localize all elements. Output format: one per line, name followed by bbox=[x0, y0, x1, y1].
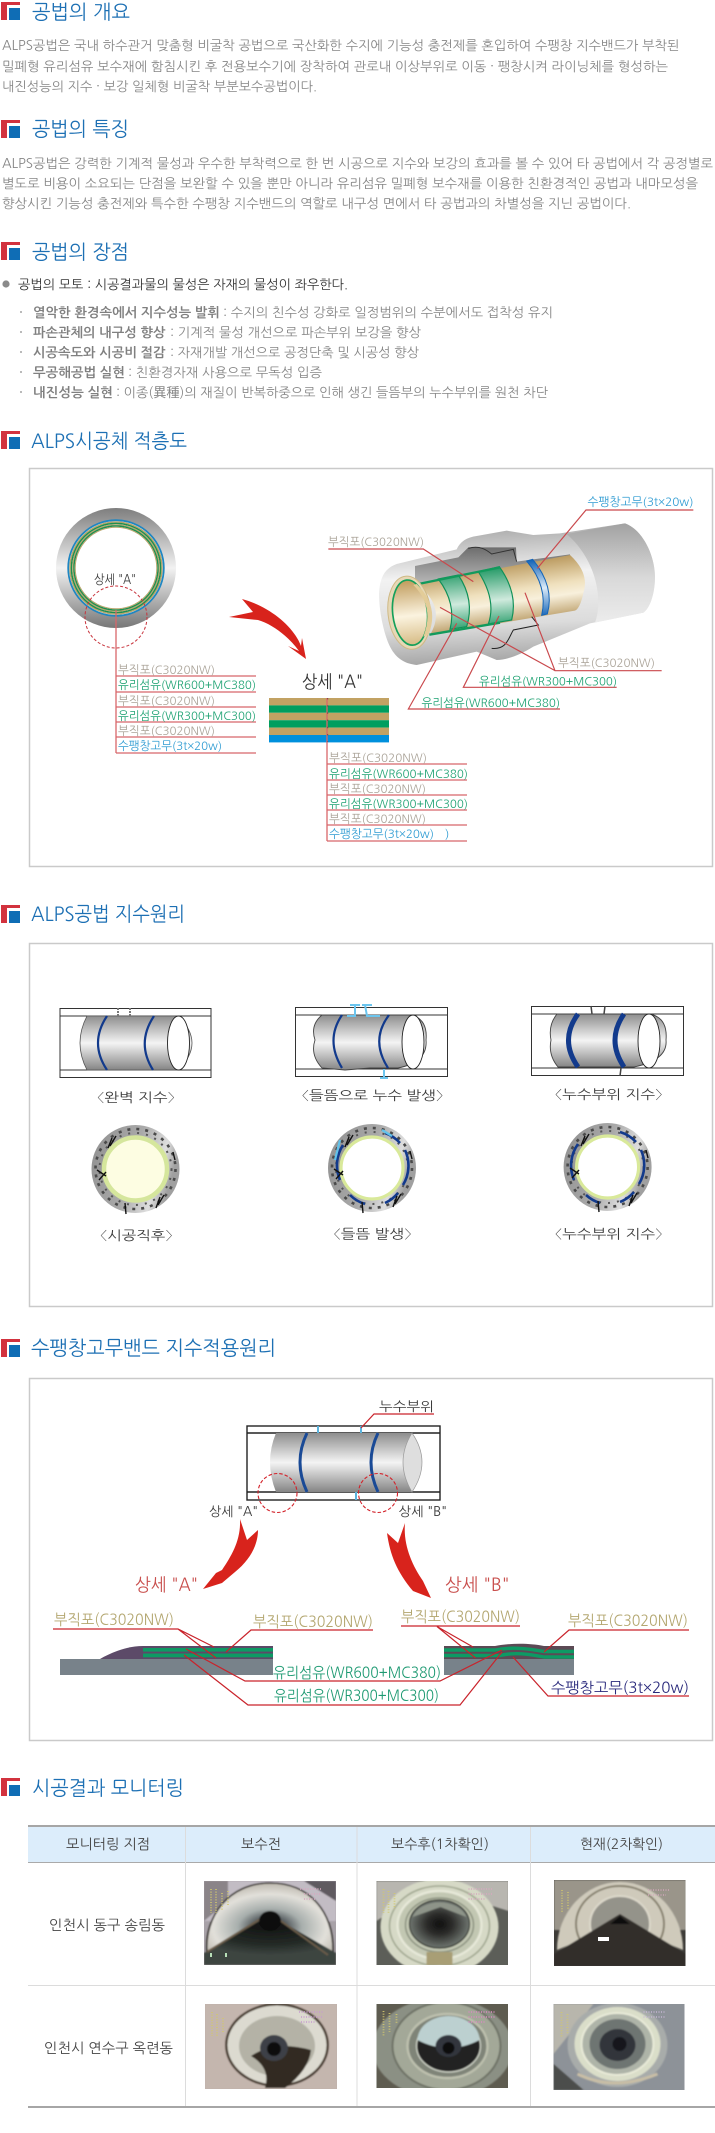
callouts: pipe labels: 부직포(C3020NW) bbox=[328, 536, 424, 548]
cross-section: 들뜸 발생 bbox=[328, 1124, 416, 1213]
leader list: stack layers: 부직포(C3020NW) bbox=[329, 752, 427, 764]
table header: 보수전 bbox=[241, 1837, 281, 1852]
label: 누수부위 지수 2: 〈누수부위 지수〉 bbox=[555, 1228, 663, 1240]
leader list: stack layers: 부직포(C3020NW) bbox=[329, 813, 426, 825]
pipe diagram: 누수부위 지수 bbox=[532, 1006, 684, 1076]
text block: features: 별도로 비용이 소요되는 단점을 보완할 수 있을 뿐만 아니라 유리섬유 밀폐형 보수재를 이용한 친환경적인 공법과 내마모성을 bbox=[2, 177, 698, 190]
label: right 부직포 1: 부직포(C3020NW) bbox=[401, 1609, 520, 1625]
row label: 인천시 연수구 옥련동: 인천시 연수구 옥련동 bbox=[44, 2041, 173, 2056]
leader list: ring layers: 부직포(C3020NW) bbox=[118, 664, 215, 676]
photo: row 1 current bbox=[554, 1880, 686, 1966]
label: 완벽 지수: 〈완벽 지수〉 bbox=[97, 1091, 175, 1104]
label: 상세 A large: 상세 "A" bbox=[302, 673, 363, 691]
heading: 공법의 특징: 공법의 특징 bbox=[32, 119, 129, 139]
callouts: pipe labels: 유리섬유(WR300+MC300) bbox=[479, 676, 617, 688]
arrow: right red bbox=[387, 1523, 431, 1598]
label: 누수부위 지수: 〈누수부위 지수〉 bbox=[555, 1088, 663, 1101]
item 1 bbox=[20, 305, 553, 319]
leader list: stack layers: ) bbox=[445, 828, 449, 840]
arrow: left red bbox=[203, 1519, 258, 1589]
cross-section: 시공직후 bbox=[92, 1125, 180, 1214]
leader list: stack layers: 수팽창고무(3t×20w) bbox=[329, 828, 434, 840]
label: left 부직포 1: 부직포(C3020NW) bbox=[54, 1612, 174, 1628]
label: 유리섬유 WR600: 유리섬유(WR600+MC380) bbox=[273, 1665, 441, 1681]
item 3 bbox=[20, 346, 419, 359]
label: 상세 B small: 상세 "B" bbox=[398, 1505, 447, 1518]
label: 상세 A small: 상세 "A" bbox=[209, 1505, 258, 1518]
photo: row 2 current bbox=[554, 2004, 684, 2090]
row label: 인천시 동구 송림동: 인천시 동구 송림동 bbox=[49, 1918, 165, 1933]
text block: features: 향상시킨 기능성 충전제와 특수한 수팽창 지수밴드의 역할로 내구성 면에서 타 공법과의 차별성을 지닌 공법이다. bbox=[2, 197, 631, 210]
3D pipe cutaway bbox=[328, 510, 693, 709]
heading: 공법의 개요: 공법의 개요 bbox=[32, 2, 130, 22]
pipe diagram: 완벽 지수 bbox=[60, 1008, 211, 1078]
label: right 부직포 2: 부직포(C3020NW) bbox=[568, 1613, 688, 1629]
item 3: 시공속도와 시공비 절감 bbox=[33, 346, 166, 359]
table: monitoring bbox=[28, 1825, 715, 2108]
label: 상세 A on ring: 상세 "A" bbox=[94, 573, 136, 586]
pipe diagram: 들뜸으로 누수 발생 bbox=[296, 1005, 448, 1078]
leader list: ring layers: 부직포(C3020NW) bbox=[118, 725, 215, 737]
panel: waterproofing principle bbox=[30, 944, 712, 1306]
motto line with bullet: 공법의 모토 : 시공결과물의 물성은 자재의 물성이 좌우한다. bbox=[18, 278, 348, 291]
heading: 시공결과 모니터링: 시공결과 모니터링 bbox=[32, 1778, 184, 1798]
cross-section: 누수부위 지수 bbox=[564, 1123, 652, 1212]
item 4: 무공해공법 실현 bbox=[33, 365, 125, 379]
heading: 수팽창고무밴드 지수적용원리: 수팽창고무밴드 지수적용원리 bbox=[31, 1338, 276, 1358]
table header: 모니터링 지점 bbox=[66, 1837, 150, 1852]
table header bbox=[28, 1825, 715, 1863]
photo: row 1 before bbox=[204, 1881, 336, 1965]
label: 시공직후: 〈시공직후〉 bbox=[100, 1229, 173, 1242]
item 2 bbox=[20, 325, 421, 339]
leader list: stack layers: 유리섬유(WR600+MC380) bbox=[329, 768, 468, 780]
text block: overview: 밀폐형 유리섬유 보수재에 함침시킨 후 전용보수기에 장착하여 관로내 이상부위로 이동 · 팽창시켜 라이닝체를 형성하는 bbox=[2, 60, 668, 73]
detail circles bbox=[258, 1474, 398, 1512]
label: 들뜸 발생: 〈들뜸 발생〉 bbox=[333, 1228, 412, 1240]
label: 상세 B red: 상세 "B" bbox=[445, 1576, 510, 1594]
leader list: stack layers: 부직포(C3020NW) bbox=[329, 783, 426, 795]
item 5: 내진성능 실현 bbox=[33, 385, 113, 399]
heading: 공법의 장점: 공법의 장점 bbox=[32, 242, 129, 262]
list: advantages bbox=[20, 305, 553, 399]
item 3: : 자재개발 개선으로 공정단축 및 시공성 향상 bbox=[170, 346, 419, 359]
leaders bbox=[53, 1626, 689, 1705]
text block: overview bbox=[2, 39, 680, 93]
detail dashed circle bbox=[85, 586, 147, 648]
photo: row 2 before bbox=[205, 2004, 337, 2089]
photo: row 2 after bbox=[376, 2004, 508, 2088]
label: 유리섬유 WR300: 유리섬유(WR300+MC300) bbox=[274, 1688, 439, 1704]
leader list: ring layers: 유리섬유(WR600+MC380) bbox=[118, 679, 256, 691]
text block: overview: 내진성능의 지수 · 보강 일체형 비굴착 부분보수공법이다. bbox=[2, 80, 317, 93]
panel: swelling band principle bbox=[30, 1378, 712, 1740]
arrow: big red curved bbox=[229, 599, 306, 659]
text block: overview: ALPS공법은 국내 하수관거 맞춤형 비굴착 공법으로 국산화한 수지에 기능성 충전제를 혼입하여 수팽창 지수밴드가 부착된 bbox=[2, 39, 680, 52]
heading: ALPS시공체 적층도: ALPS시공체 적층도 bbox=[31, 431, 187, 451]
section diagram B bbox=[444, 1644, 574, 1675]
callouts: pipe labels bbox=[328, 496, 694, 709]
text block: features bbox=[2, 157, 713, 210]
item 2: : 기계적 물성 개선으로 파손부위 보강을 향상 bbox=[170, 326, 421, 339]
table header: 현재(2차확인) bbox=[580, 1837, 663, 1852]
text block: features: ALPS공법은 강력한 기계적 물성과 우수한 부착력으로 한 번 시공으로 지수와 보강의 효과를 볼 수 있어 타 공법에서 각 공정별로 bbox=[2, 157, 713, 170]
leader list: ring layers: 수팽창고무(3t×20w) bbox=[118, 740, 222, 752]
label: 수팽창고무: 수팽창고무(3t×20w) bbox=[551, 1680, 689, 1696]
callouts: pipe labels: 유리섬유(WR600+MC380) bbox=[422, 697, 560, 709]
label: 들뜸으로 누수 발생: 〈들뜸으로 누수 발생〉 bbox=[302, 1089, 443, 1102]
label: 상세 A red: 상세 "A" bbox=[135, 1576, 198, 1594]
item 1: 열악한 환경속에서 지수성능 발휘 bbox=[33, 305, 220, 319]
item 4 bbox=[20, 365, 322, 379]
label: 누수부위 bbox=[361, 1400, 434, 1428]
item 1: : 수지의 친수성 강화로 일정범위의 수분에서도 접착성 유지 bbox=[223, 306, 553, 319]
callouts: pipe labels: 수팽창고무(3t×20w) bbox=[588, 496, 694, 508]
leader list: stack layers: 유리섬유(WR300+MC300) bbox=[329, 798, 468, 810]
heading: ALPS공법 지수원리: ALPS공법 지수원리 bbox=[31, 904, 185, 924]
item 2: 파손관체의 내구성 향상 bbox=[33, 325, 166, 339]
leader list: ring layers: 유리섬유(WR300+MC300) bbox=[118, 710, 256, 722]
label: left 부직포 2: 부직포(C3020NW) bbox=[253, 1614, 373, 1630]
leader list: stack layers bbox=[327, 698, 468, 841]
layer stack bbox=[269, 698, 389, 742]
callouts: pipe labels: 부직포(C3020NW) bbox=[558, 657, 655, 669]
label: 누수부위: 누수부위 bbox=[379, 1400, 434, 1413]
pipe diagram with detail circles bbox=[247, 1426, 440, 1500]
item 5: : 이종(異種)의 재질이 반복하중으로 인해 생긴 들뜸부의 누수부위를 원천 차단 bbox=[116, 385, 548, 399]
section diagram A bbox=[60, 1646, 273, 1675]
leader list: ring layers: 부직포(C3020NW) bbox=[118, 695, 215, 707]
leader list: ring layers bbox=[116, 610, 256, 753]
photo: row 1 after bbox=[376, 1881, 508, 1965]
item 4: : 친환경자재 사용으로 무독성 입증 bbox=[128, 366, 322, 379]
panel: lamination diagram bbox=[30, 468, 712, 866]
table header: 보수후(1차확인) bbox=[391, 1837, 489, 1852]
pipe cross-section ring bbox=[56, 508, 176, 628]
